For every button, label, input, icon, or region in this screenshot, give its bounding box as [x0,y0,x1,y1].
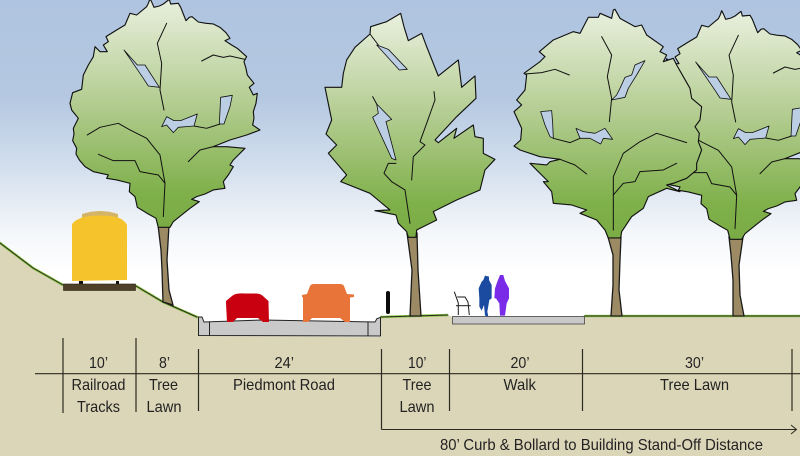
crown [514,9,702,238]
ground cross-section [0,243,800,456]
dimension lines [35,338,800,430]
labels: piedmont road [233,355,335,394]
crown [642,11,800,239]
railroad car [64,211,136,290]
tree 1 [70,0,260,305]
car body [72,216,127,281]
tree 2 [325,13,495,316]
tree 3 [514,9,702,316]
crown [325,13,495,237]
labels: railroad tracks: 10’ [89,355,108,372]
labels: railroad tracks: Railroad [72,377,126,394]
trunk [608,237,622,316]
trunk [158,225,173,305]
red car [226,293,269,322]
wheels [79,281,119,284]
sky background [0,0,800,320]
labels: tree lawn 8: Lawn [146,399,182,416]
labels: railroad tracks [72,355,126,416]
labels: tree lawn 30: Tree Lawn [660,377,729,394]
trunk [407,233,421,316]
bollard [386,291,390,314]
car roof [82,211,118,222]
stand-off caption: 80’ Curb & Bollard to Building Stand-Off Distance [440,437,763,454]
walk slab [452,316,584,324]
stand-off arrow [382,425,796,434]
labels: tree lawn 8: Tree [149,377,178,394]
labels: walk: 20’ [510,355,530,372]
curb joints [210,322,368,336]
rail bed [64,284,136,290]
labels: piedmont road: 24’ [274,355,294,372]
labels: tree lawn 10: Tree [402,377,432,394]
labels: tree lawn 10: 10’ [408,355,426,372]
labels: tree lawn 30 [660,355,729,394]
labels: tree lawn 8: 8’ [159,355,170,372]
labels: tree lawn 8 [146,355,182,416]
person: purple [494,275,509,316]
tree 4 [642,11,800,316]
labels: walk [504,355,537,394]
labels: railroad tracks: Tracks [77,399,120,416]
person: blue [479,276,492,317]
labels: tree lawn 10: Lawn [400,399,434,416]
bench [454,292,471,315]
labels: walk: Walk [504,377,537,394]
orange car [302,284,354,322]
labels: piedmont road: Piedmont Road [233,377,335,394]
road slab [198,317,380,336]
road section [198,317,380,336]
labels: tree lawn 10 [400,355,434,416]
crown [70,0,260,227]
labels: tree lawn 30: 30’ [685,355,704,372]
trunk [729,237,744,316]
grass line [0,243,800,317]
